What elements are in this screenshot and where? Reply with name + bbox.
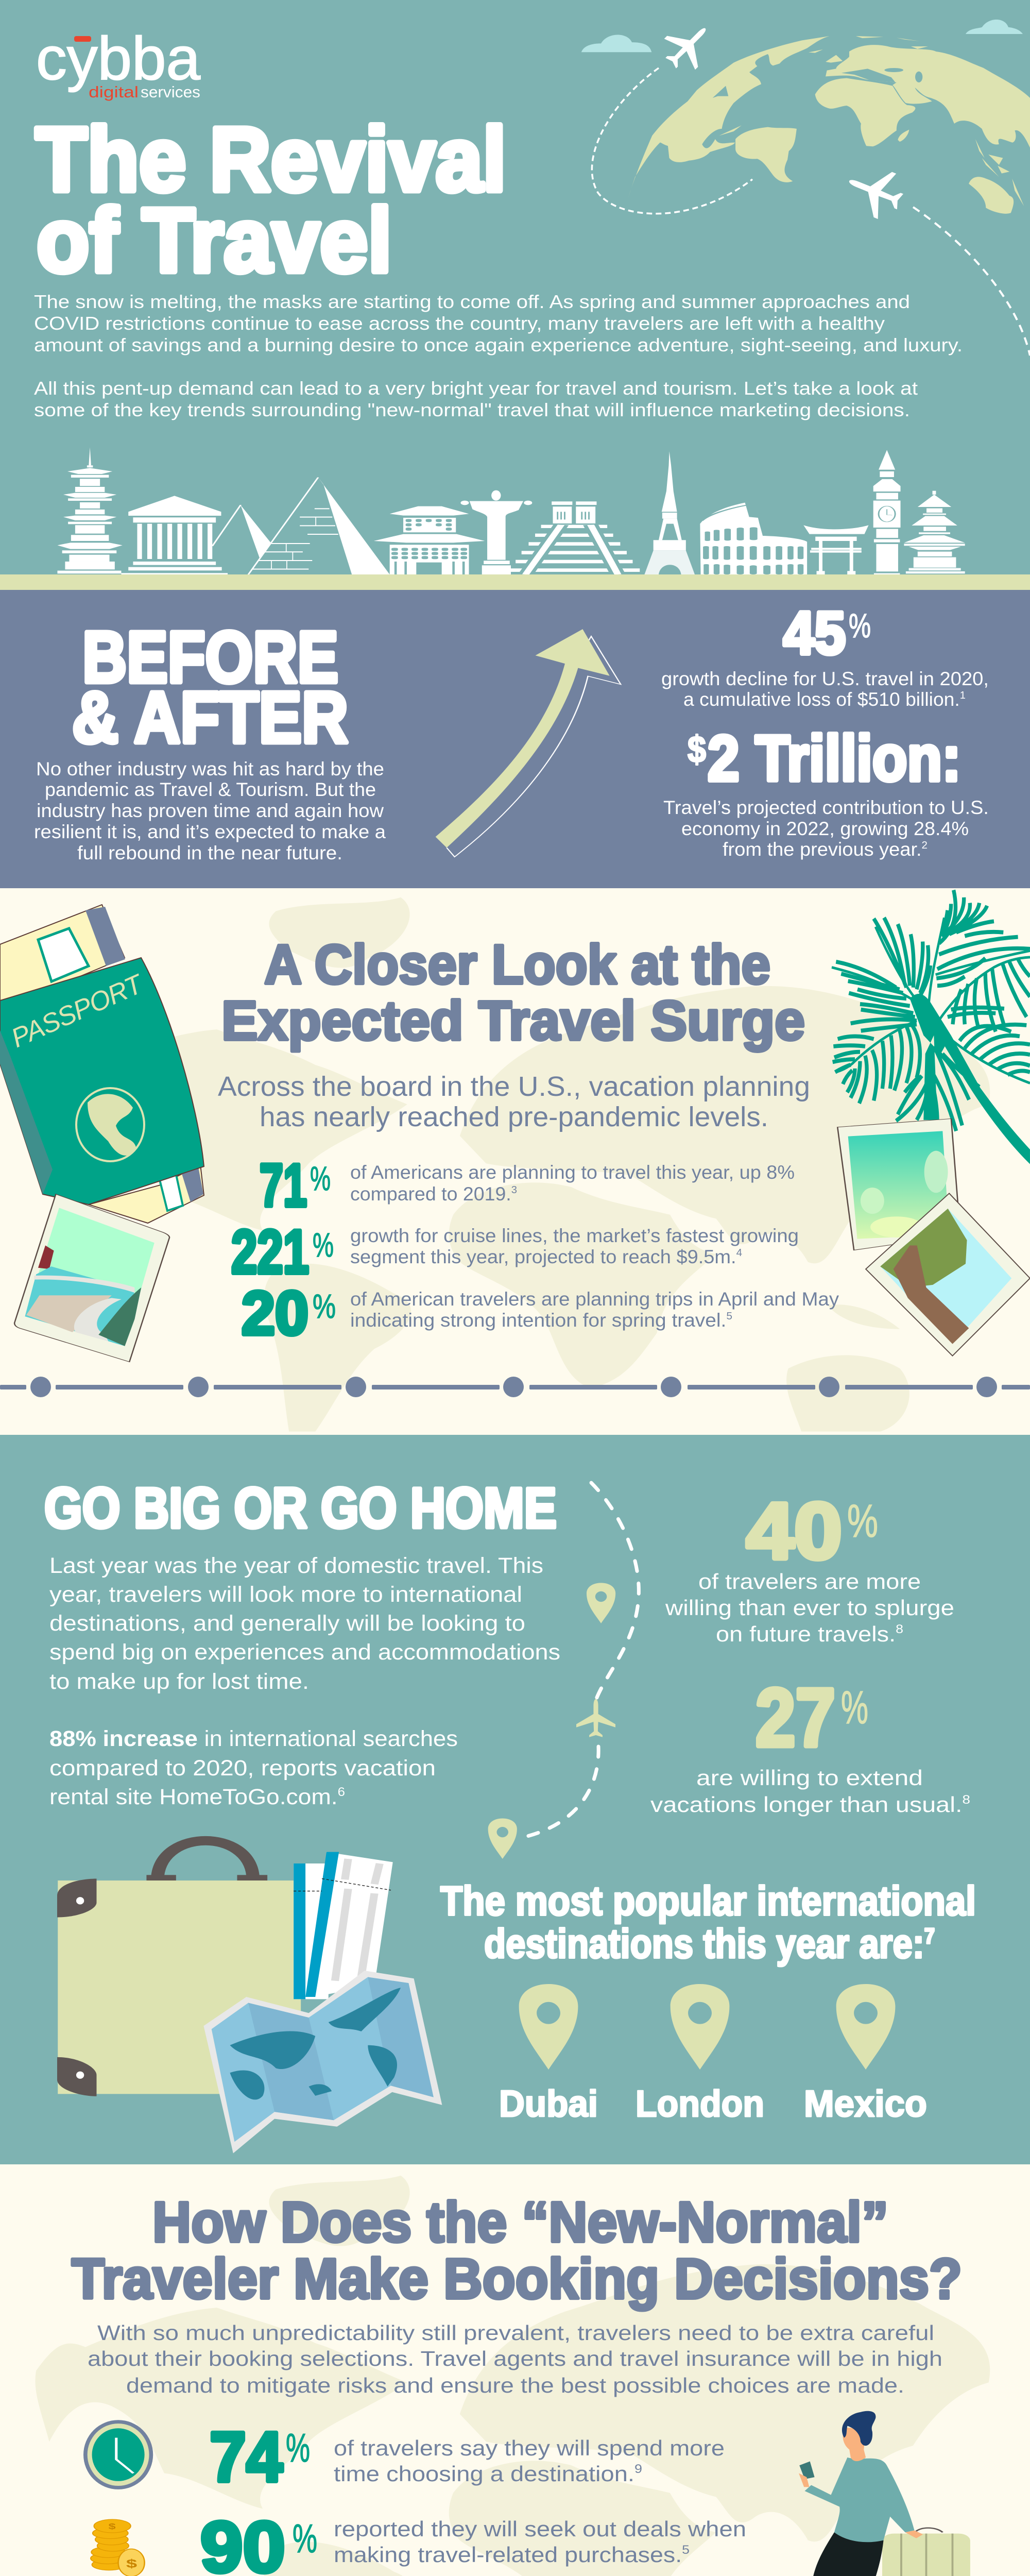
panel: closer look [0,888,1030,1435]
stat: 90 percent: reported they will seek out deals when [334,2517,746,2541]
landmark: asian temple [374,506,485,574]
stat: 74 percent: 74 [210,2418,283,2497]
logo: cybba digital services: cybba [36,25,200,93]
intro text: COVID restrictions continue to ease across the country, many travelers are left with a healthy [34,313,885,334]
subheading: has nearly reached pre-pandemic levels. [260,1101,768,1132]
stat: 2 trillion: 2 Trillion: [708,723,961,794]
stat: 221 percent: segment this year, projected to reach $9.5m. [350,1246,726,1267]
stat: 45 percent: % [849,606,871,645]
logo: cybba digital services: digital [89,83,139,101]
text: go big intro [49,1553,560,1809]
text: before and after intro: industry has proven time and again how [37,800,384,821]
stat: 27 percent: % [841,1682,868,1734]
intro text: All this pent-up demand can lead to a very bright year for travel and tourism. Let’s take a look at [34,378,918,399]
stat: 45 percent: a cumulative loss of $510 billion. [683,689,958,710]
stat: 45 percent: 45 [783,599,846,667]
stat: 74 percent [210,2418,725,2497]
subheading: Across the board in the U.S., vacation planning [218,1071,810,1102]
stat: 71 percent [260,1151,795,1219]
heading: booking decisions [72,2191,962,2311]
destination: Dubai [499,1984,598,2125]
landmark: eiffel tower [644,451,695,574]
dashed travel route with pins and plane [488,1483,639,1859]
stat: 20 percent: 5 [726,1311,732,1322]
heading: closer look: A Closer Look at the [264,933,770,995]
stat: 71 percent: compared to 2019. [350,1183,509,1205]
text: booking intro: demand to mitigate risks and ensure the best possible choices are made. [126,2374,904,2397]
icon: boarding passes [294,1852,393,1999]
intro text: amount of savings and a burning desire to once again experience adventure, sight-seeing, and luxury. [34,334,963,355]
stat: 2 trillion: economy in 2022, growing 28.4% [681,818,969,839]
subheading [218,1071,810,1132]
heading: popular destinations: destinations this year are: [484,1921,994,1967]
landmark: pyramids [212,478,390,574]
icon: coins: $ [126,2557,138,2570]
world map watermark [35,897,990,1432]
stat: 20 percent: 20 [242,1279,308,1348]
figure: woman with phone [799,2411,923,2576]
heading: before and after [72,616,348,758]
text: go big intro: 88% increase in international searches [49,1726,458,1751]
stat: 20 percent [242,1279,839,1348]
stat: 90 percent: making travel-related purchases. [334,2543,647,2567]
text: go big intro: spend big on experiences and accommodations [49,1640,560,1665]
panel: go big or go home [0,1435,1030,2164]
panel: before and after [0,590,1030,889]
title: of Travel [37,190,392,291]
stat: 45 percent: 1 [960,690,966,701]
landmark: mayan pyramid [511,501,640,574]
text: before and after intro [34,758,386,863]
illustration: sky photo [837,1118,960,1250]
stat: 71 percent: 71 [260,1151,307,1219]
stat: 2 trillion: $ [688,729,706,770]
stat: 27 percent: 27 [756,1671,835,1764]
illustration: traveler with suitcase [799,2411,970,2576]
globe illustration [628,36,1030,214]
intro text: some of the key trends surrounding "new-normal" travel that will influence marketing decisions. [34,399,910,420]
icon: clock [83,2420,153,2489]
text: booking intro [88,2321,942,2397]
stat: 2 trillion: 2 [922,840,928,851]
stat: 221 percent: % [313,1226,334,1264]
text: go big intro: Last year was the year of domestic travel. This [49,1553,543,1578]
text: go big intro: destinations, and generally will be looking to [49,1611,525,1636]
icon: rolling suitcase [882,2528,970,2576]
stat: 74 percent: time choosing a destination. [334,2462,602,2486]
illustration: bridge photo [14,1194,169,1362]
stat: 74 percent: 9 [634,2462,642,2476]
stat: 71 percent: 3 [511,1184,517,1196]
stat: 27 percent: are willing to extend [696,1766,923,1790]
destination: London: London [636,2083,764,2125]
stat: 20 percent: indicating strong intention for spring travel. [350,1310,708,1331]
destination: Mexico [804,1984,927,2125]
text: go big intro: to make up for lost time. [49,1669,309,1694]
stat: 40 percent [665,1486,954,1646]
illustration: passport [0,905,204,1223]
stat: 40 percent: % [847,1496,878,1547]
stat: 90 percent [200,2506,746,2576]
landmark: greek temple [121,496,228,574]
heading: before and after: BEFORE [82,616,338,698]
text: booking intro: With so much unpredictability still prevalent, travelers need to be extra careful [97,2321,934,2345]
stat: 45 percent [661,599,989,710]
icon: suitcase [57,1841,301,2096]
intro text: The snow is melting, the masks are starting to come off. As spring and summer approaches and [34,291,910,312]
stat: 221 percent: 221 [231,1217,309,1286]
stat: 40 percent: 8 [896,1622,903,1636]
stat: 40 percent: willing than ever to splurge [665,1596,954,1620]
stat: 20 percent: of American travelers are planning trips in April and May [350,1289,839,1310]
arrow: upward growth [436,629,621,857]
heading: before and after: & AFTER [72,676,348,758]
stat: 27 percent [650,1671,970,1817]
intro text [34,291,963,420]
landmark: nepali pagoda [904,491,965,573]
icon: airplanes and dashed flight paths [592,13,1030,355]
stat: 221 percent: 4 [736,1247,742,1259]
heading: popular destinations: 7 [924,1924,935,1948]
icon: clouds [581,20,1023,52]
stat: 74 percent: % [286,2425,310,2470]
text: booking intro: about their booking selections. Travel agents and travel insurance will be in high [88,2347,942,2370]
world map watermark [35,2176,990,2576]
ground band [0,574,1030,590]
text: before and after intro: full rebound in the near future. [77,842,342,863]
landmark: pagoda [57,447,123,573]
stat: 40 percent: on future travels. [716,1622,877,1646]
heading: booking decisions: How Does the “New-Normal” [152,2191,888,2254]
stat: 40 percent: of travelers are more [698,1569,921,1594]
heading: closer look: Expected Travel Surge [221,989,805,1052]
stat: 71 percent: of Americans are planning to travel this year, up 8% [350,1162,795,1183]
heading: popular destinations [440,1878,976,1967]
stat: 20 percent: % [313,1287,336,1325]
landmark: big ben [873,450,901,574]
destination: Mexico: Mexico [804,2083,927,2125]
heading: go big or go home: GO BIG OR GO HOME [44,1477,557,1540]
landmark: colosseum [700,503,807,574]
panel: booking decisions [0,2164,1030,2576]
illustration: suitcase, tickets and map [57,1841,442,2154]
text: before and after intro: No other industry was hit as hard by the [36,758,384,779]
text: passport label: PASSPORT [7,969,148,1054]
stat: 74 percent: of travelers say they will spend more [334,2436,725,2460]
skyline of world landmarks [57,447,965,574]
stat: 71 percent: % [310,1159,331,1197]
stat: 27 percent: 8 [963,1793,970,1807]
icon: folded world map [203,1971,442,2154]
title [36,109,506,291]
icon: coins [91,2519,145,2576]
text: go big intro: rental site HomeToGo.com. [49,1785,318,1809]
illustration: palm tree [832,890,1030,1164]
landmark: torii gate [803,525,869,574]
destination: Dubai: Dubai [499,2083,598,2125]
panel: hero [0,0,1030,590]
heading: booking decisions: Traveler Make Booking Decisions? [72,2247,962,2311]
stat: 2 trillion: from the previous year. [723,839,916,860]
illustration: tree photo [866,1193,1030,1356]
stat: 90 percent: % [293,2516,317,2561]
text: before and after intro: pandemic as Travel & Tourism. But the [45,779,376,800]
heading: popular destinations: The most popular international [440,1878,976,1924]
heading: closer look [221,933,805,1052]
logo: cybba digital services: services [141,83,200,101]
icon: passport globe [76,1088,144,1161]
text: go big intro: compared to 2020, reports vacation [49,1756,436,1781]
destination: London [636,1984,764,2125]
stat: 221 percent [231,1217,799,1286]
stat: 2 trillion: Travel’s projected contribution to U.S. [663,797,989,818]
stat: 2 trillion [663,723,989,860]
stat: 45 percent: growth decline for U.S. travel in 2020, [661,668,989,689]
text: go big intro: 6 [338,1785,345,1799]
title: The Revival [36,109,506,210]
text: go big intro: year, travelers will look more to international [49,1582,522,1607]
stat: 90 percent: 5 [682,2543,690,2557]
text: before and after intro: resilient it is, and it’s expected to make a [34,821,386,842]
icon: coins: $ [108,2522,116,2531]
stat: 40 percent: 40 [746,1486,842,1575]
landmark: christ the redeemer [460,490,532,574]
stat: 221 percent: growth for cruise lines, the market’s fastest growing [350,1225,799,1246]
stat: 27 percent: vacations longer than usual. [650,1792,920,1817]
